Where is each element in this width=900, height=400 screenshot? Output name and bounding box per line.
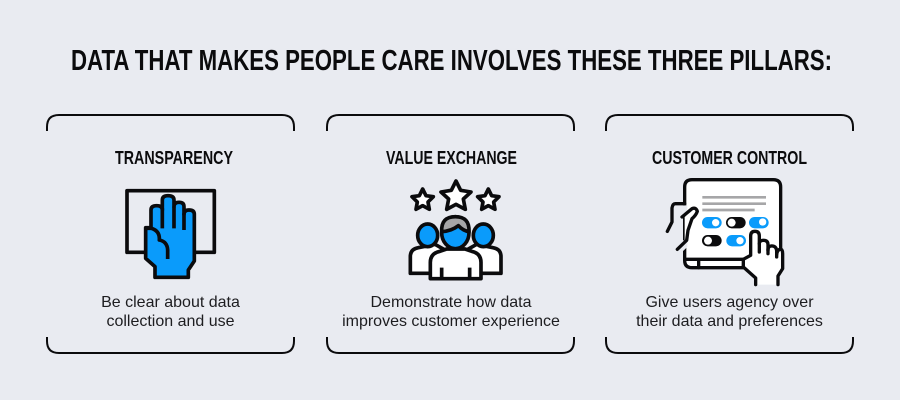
description: customer control: Give users agency over <box>645 294 814 311</box>
description: value exchange: improves customer experience <box>342 313 560 330</box>
description: transparency: collection and use <box>106 313 235 330</box>
panel bottom bracket <box>606 337 853 353</box>
panel bottom bracket <box>47 337 294 353</box>
description: value exchange: Demonstrate how data <box>371 294 532 311</box>
panel top bracket <box>47 115 294 131</box>
panel: customer control <box>606 115 853 353</box>
panel bottom bracket <box>327 337 574 353</box>
description: customer control <box>636 294 823 330</box>
panel: transparency <box>47 115 294 353</box>
panel: value exchange <box>327 115 574 353</box>
description: value exchange <box>342 294 560 330</box>
icon: people with stars <box>410 181 501 279</box>
description: customer control: their data and preferences <box>636 313 823 330</box>
description: transparency <box>101 294 240 330</box>
description: transparency: Be clear about data <box>101 294 240 311</box>
panel top bracket <box>327 115 574 131</box>
icon: tablet with toggles and hands <box>667 180 783 285</box>
heading: value exchange: VALUE EXCHANGE <box>386 148 517 168</box>
heading: transparency: TRANSPARENCY <box>115 148 233 168</box>
icon: hand over screen <box>127 191 214 277</box>
panel top bracket <box>606 115 853 131</box>
heading: customer control: CUSTOMER CONTROL <box>652 148 807 168</box>
